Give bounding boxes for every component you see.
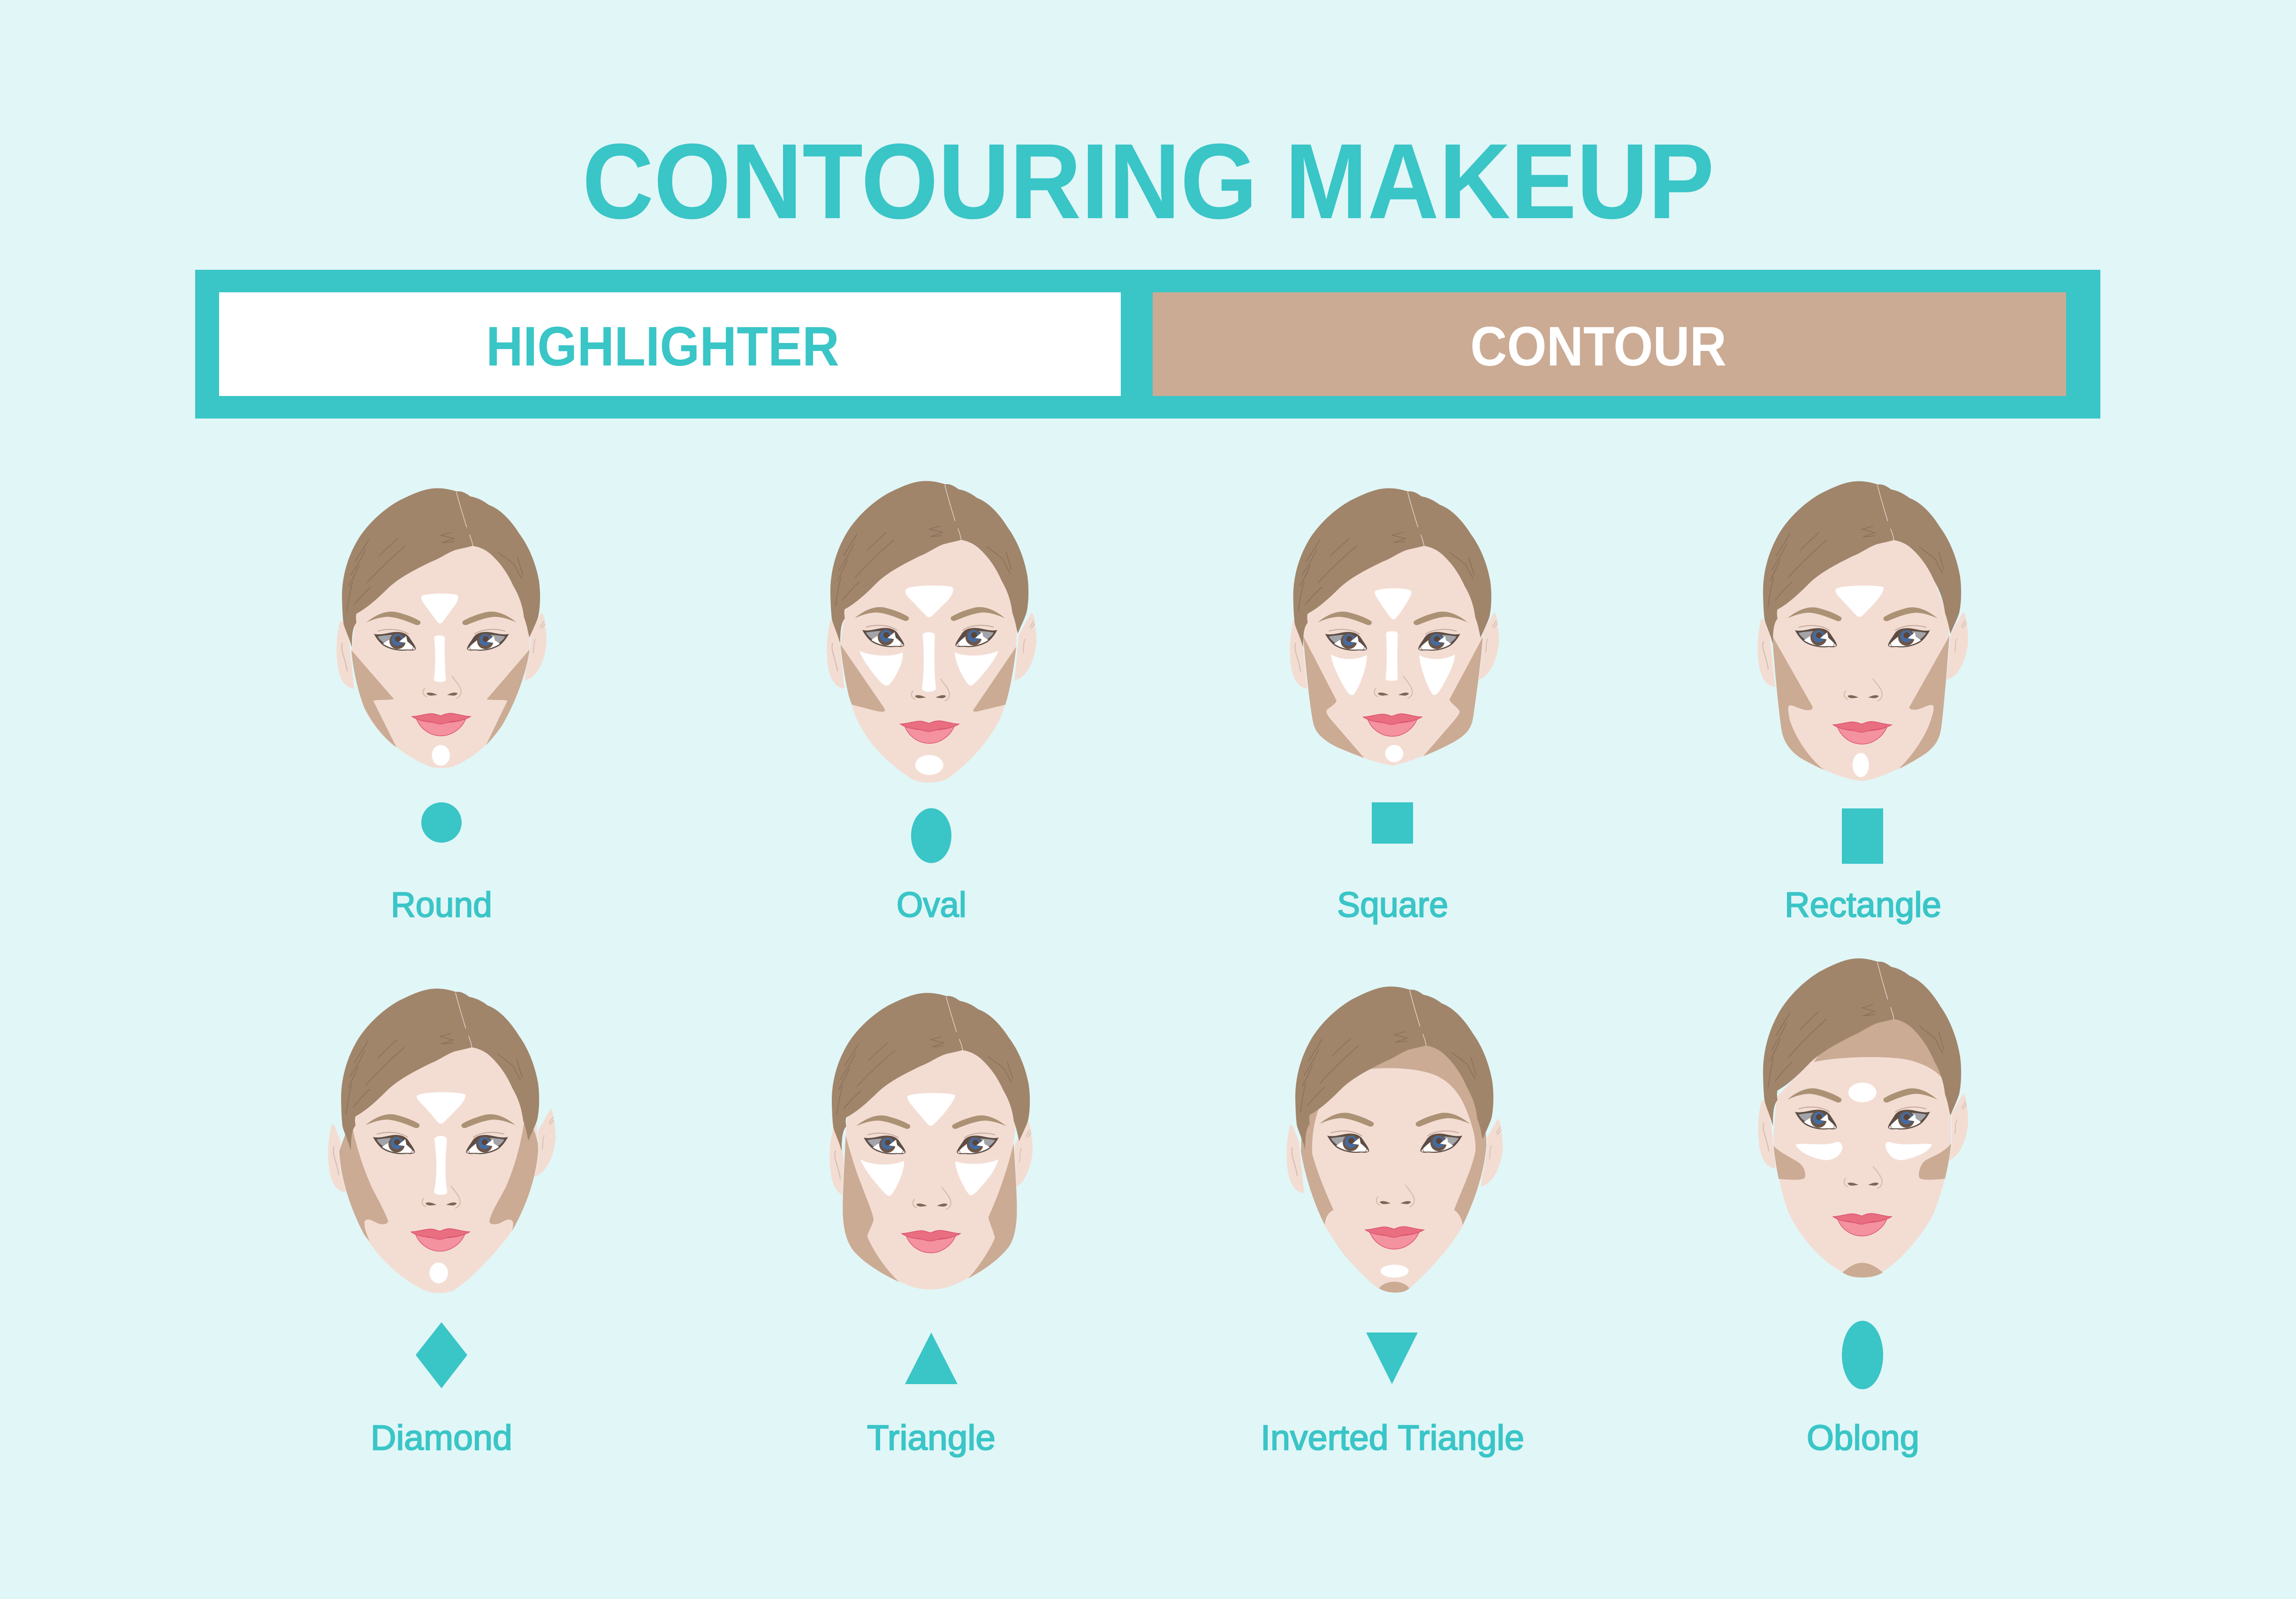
lips (1833, 722, 1892, 744)
nose (1374, 676, 1413, 699)
oval face skin with contour and highlighter (839, 525, 1018, 783)
square face skin with contour and highlighter (1302, 533, 1484, 766)
hair, brows and eyes (1293, 488, 1491, 651)
hair, brows and eyes (341, 989, 539, 1154)
right ear (1946, 1094, 1968, 1161)
oblong face skin with contour and highlighter (1771, 1004, 1953, 1281)
label: round: Round (391, 885, 492, 924)
hair, brows and eyes (1763, 959, 1961, 1129)
icon: diamond (416, 1322, 467, 1388)
icon: oval (911, 808, 951, 863)
hair, brows and eyes (830, 481, 1028, 647)
legend: contour: CONTOUR (1470, 315, 1726, 378)
left ear (1290, 620, 1308, 689)
face: oblong (1758, 959, 1968, 1281)
right ear (1015, 613, 1036, 680)
left ear (1757, 618, 1775, 687)
lips (412, 713, 471, 736)
icon: circle (421, 802, 462, 843)
nose (913, 1187, 951, 1210)
left ear (336, 620, 354, 689)
icon: oblong (1842, 1321, 1883, 1389)
title: CONTOURING MAKEUP (582, 122, 1714, 241)
right ear (1011, 1122, 1033, 1189)
nose (1844, 1166, 1882, 1188)
rectangle face skin with contour and highlighter (1771, 527, 1951, 782)
label: inverted triangle: Inverted Triangle (1261, 1418, 1524, 1457)
icon: rectangle (1842, 808, 1883, 864)
label: diamond: Diamond (371, 1418, 512, 1457)
face: rectangle (1757, 481, 1968, 782)
inverted triangle face skin with contour and highlighter (1300, 1031, 1487, 1293)
nose (1376, 1185, 1414, 1207)
face: oval (827, 481, 1036, 783)
left ear (1758, 1100, 1776, 1168)
face: inverted triangle (1286, 987, 1503, 1293)
lips (902, 1230, 960, 1253)
label: rectangle: Rectangle (1785, 885, 1941, 924)
diamond face skin with contour and highlighter (339, 1035, 539, 1294)
lips (1363, 714, 1422, 736)
left ear (328, 1124, 346, 1192)
legend: highlighter (219, 292, 1121, 396)
face: square (1290, 488, 1499, 766)
hair, brows and eyes (342, 488, 540, 651)
face: diamond (328, 989, 555, 1294)
legend band (195, 270, 2100, 419)
right ear (1481, 1119, 1503, 1187)
lips (1833, 1213, 1892, 1236)
lips (900, 721, 959, 743)
nose (422, 1186, 460, 1208)
hair, brows and eyes (1763, 481, 1961, 647)
right ear (534, 1109, 555, 1177)
right ear (525, 613, 547, 681)
right ear (1946, 612, 1968, 680)
label: triangle: Triangle (867, 1418, 996, 1457)
hair, brows and eyes (832, 993, 1030, 1154)
lips (1365, 1226, 1424, 1249)
icon: triangle (905, 1332, 958, 1384)
legend: highlighter: HIGHLIGHTER (486, 315, 839, 378)
icon: inverted triangle (1366, 1332, 1418, 1384)
nose (423, 676, 461, 699)
label: square: Square (1337, 885, 1448, 924)
hair, brows and eyes (1295, 987, 1493, 1153)
left ear (829, 1127, 847, 1196)
label: oblong: Oblong (1807, 1418, 1919, 1457)
triangle face skin with contour and highlighter (841, 1035, 1020, 1290)
right ear (1477, 612, 1499, 680)
label: oval: Oval (897, 885, 966, 924)
lips (411, 1229, 470, 1251)
left ear (1286, 1125, 1304, 1193)
nose (912, 679, 950, 701)
nose (1844, 679, 1882, 701)
round face skin with contour and highlighter (351, 525, 531, 769)
icon: square (1372, 802, 1413, 844)
face: round (336, 488, 547, 769)
legend: contour (1153, 292, 2066, 396)
left ear (827, 620, 844, 688)
face: triangle (829, 993, 1033, 1290)
